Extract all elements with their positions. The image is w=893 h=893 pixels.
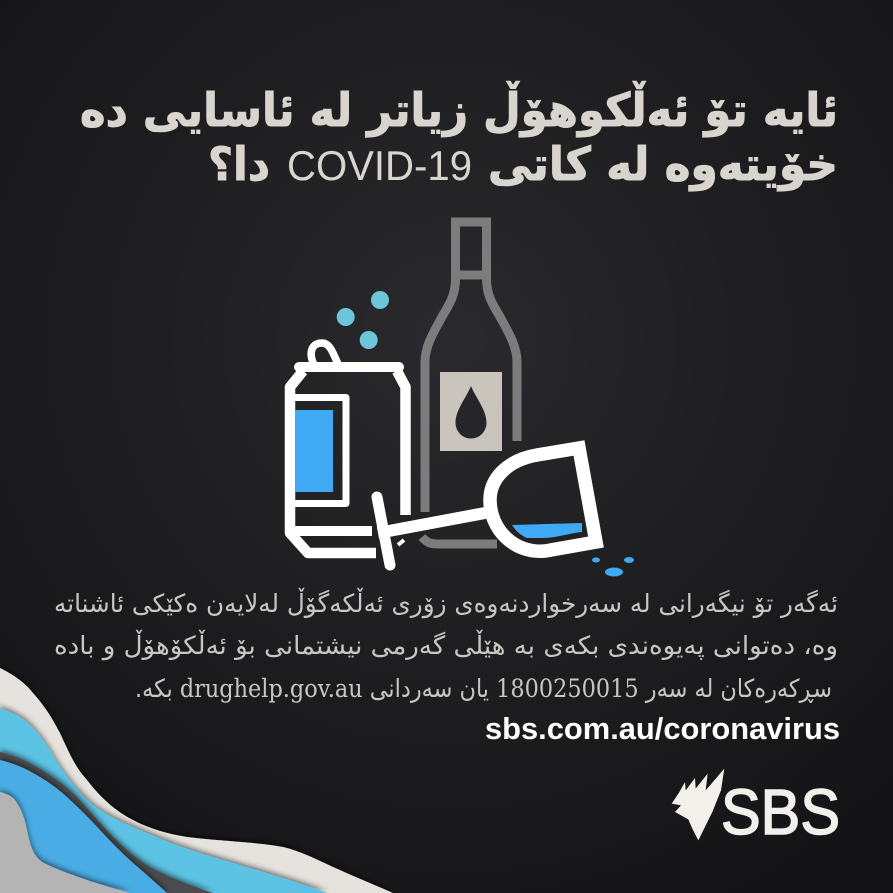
title line 2 arabic start: خۆیتەوە لە کاتی [488, 137, 838, 191]
bottle label [440, 372, 502, 451]
can [290, 343, 406, 553]
can label frame [290, 398, 346, 504]
bubbles [337, 291, 389, 349]
title COVID-19: COVID-19 [287, 142, 472, 189]
glass bowl [490, 448, 596, 551]
spilled drops [592, 557, 634, 576]
glass stem [378, 513, 485, 533]
body line 3: سڕکەرەکان لە سەر 1800250015 یان سەردانی drughelp.gov.au بکە. [135, 674, 832, 703]
title [80, 81, 838, 191]
body line 1: ئەگەر تۆ نیگەرانی لە سەرخواردنەوەی زۆری ئەڵکەگۆڵ لەلایەن ەکێکی ئاشناتە [54, 587, 838, 619]
wave: cyan layer [0, 708, 327, 893]
wine in glass [512, 523, 582, 538]
wave: blue layer [0, 760, 167, 893]
title line 2 arabic end: دا؟ [208, 137, 270, 191]
SBS logo [672, 769, 840, 848]
bottle label drop [456, 386, 486, 438]
body text [54, 587, 838, 703]
title line 1: ئایە تۆ ئەڵکوهۆڵ زیاتر لە ئاسایی دە [80, 81, 838, 137]
can label blue [295, 410, 333, 492]
wave: grey layer [0, 792, 130, 893]
wave: white layer [0, 668, 393, 893]
can body [290, 371, 376, 553]
wave: dark grey layer [0, 752, 213, 893]
body line 2: وە، دەتوانی پەیوەندی بکەی بە هێڵی گەرمی نیشتمانی بۆ ئەڵکۆهۆڵ و بادە [54, 629, 838, 661]
SBS mercury icon [672, 769, 724, 840]
illustration: drinks [290, 222, 634, 576]
can rim [299, 362, 399, 372]
glass [377, 448, 596, 565]
can band [290, 526, 372, 536]
SBS wordmark: SBS [721, 776, 840, 848]
can pull tab [311, 343, 338, 365]
website url: sbs.com.au/coronavirus [485, 711, 840, 746]
decorative paper waves [0, 668, 393, 893]
bottle [422, 222, 517, 544]
